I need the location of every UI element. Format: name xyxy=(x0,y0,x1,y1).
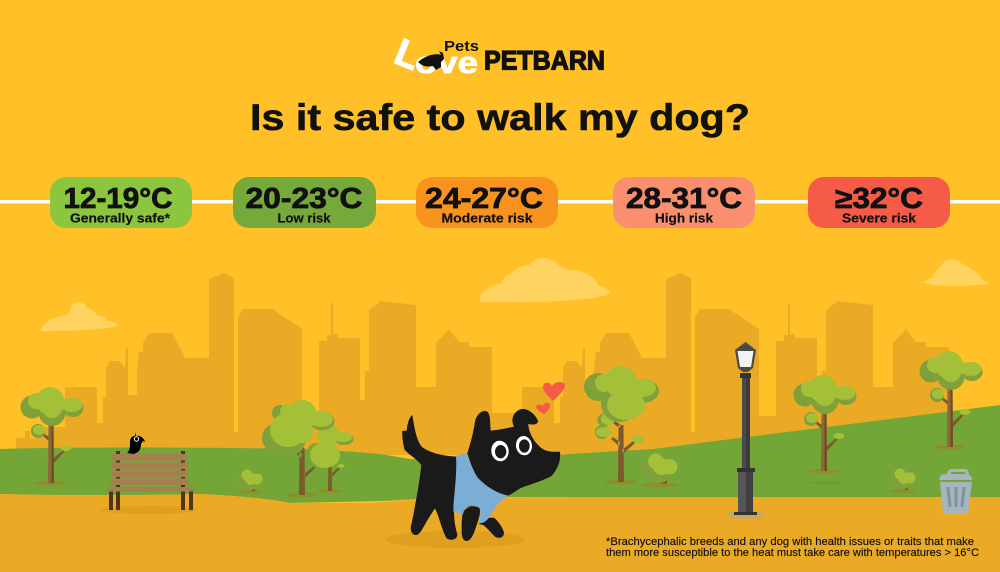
risk pill: moderate xyxy=(416,177,558,228)
white timeline line xyxy=(0,200,1000,204)
logo word PETBARN: PETBARN xyxy=(484,46,605,76)
bush centre right xyxy=(642,453,678,488)
risk pill: severe: ≥32°C xyxy=(835,183,923,215)
city skyline xyxy=(16,273,949,458)
cloud centre xyxy=(480,258,610,302)
small bush left xyxy=(237,469,263,494)
tree right centre xyxy=(794,375,856,474)
dog shadow xyxy=(385,531,525,548)
dog head xyxy=(467,409,560,496)
dog body and tail xyxy=(402,415,480,540)
lawn shadow xyxy=(810,481,844,485)
footnote xyxy=(606,536,979,559)
dog far front leg xyxy=(479,518,504,538)
risk pill: generally safe: Generally safe* xyxy=(70,212,170,226)
footnote: *Brachycephalic breeds and any dog with health issues or traits that make xyxy=(606,536,974,548)
risk pill: severe xyxy=(808,177,950,228)
risk pill: generally safe: 12-19°C xyxy=(64,183,172,215)
logo word Pets: Pets xyxy=(444,38,479,55)
logo letters ove: ove xyxy=(415,45,478,80)
lamp post xyxy=(726,342,766,519)
small tree behind big tree xyxy=(307,424,354,493)
tree centre right xyxy=(584,366,659,484)
risk pill: high: High risk xyxy=(655,212,713,226)
risk pill: severe: Severe risk xyxy=(842,212,916,226)
risk pill: low: 20-23°C xyxy=(246,183,362,215)
trash can xyxy=(939,469,972,514)
title: Is it safe to walk my dog? xyxy=(250,96,750,138)
logo letter L: L xyxy=(389,31,426,79)
risk pill: moderate: Moderate risk xyxy=(442,212,533,226)
footnote: them more susceptible to the heat must take care with temperatures > 16°C xyxy=(606,547,979,559)
bush right xyxy=(890,468,916,493)
risk pill: generally safe xyxy=(50,177,192,228)
risk pill: high xyxy=(613,177,755,228)
park bench xyxy=(100,451,198,514)
cloud left xyxy=(40,302,117,331)
cloud right xyxy=(923,259,989,286)
dog eye left xyxy=(490,440,510,462)
tree far right xyxy=(920,351,982,450)
logo xyxy=(389,31,605,80)
risk pill: high: 28-31°C xyxy=(626,183,742,215)
dog xyxy=(402,409,560,541)
risk pill: low: Low risk xyxy=(278,212,331,226)
risk pill: low xyxy=(233,177,376,228)
ground path xyxy=(0,494,1000,572)
heart large xyxy=(543,382,565,401)
green park lawn xyxy=(0,405,1000,503)
risk pill: moderate: 24-27°C xyxy=(425,183,543,215)
dog front leg xyxy=(462,506,480,541)
tree far left xyxy=(20,387,84,486)
dog vest xyxy=(453,453,508,523)
bird on bench xyxy=(127,432,145,454)
big tree left xyxy=(262,400,334,498)
dog eye right xyxy=(515,435,533,456)
logo dog icon xyxy=(418,51,444,70)
heart small xyxy=(536,403,550,414)
